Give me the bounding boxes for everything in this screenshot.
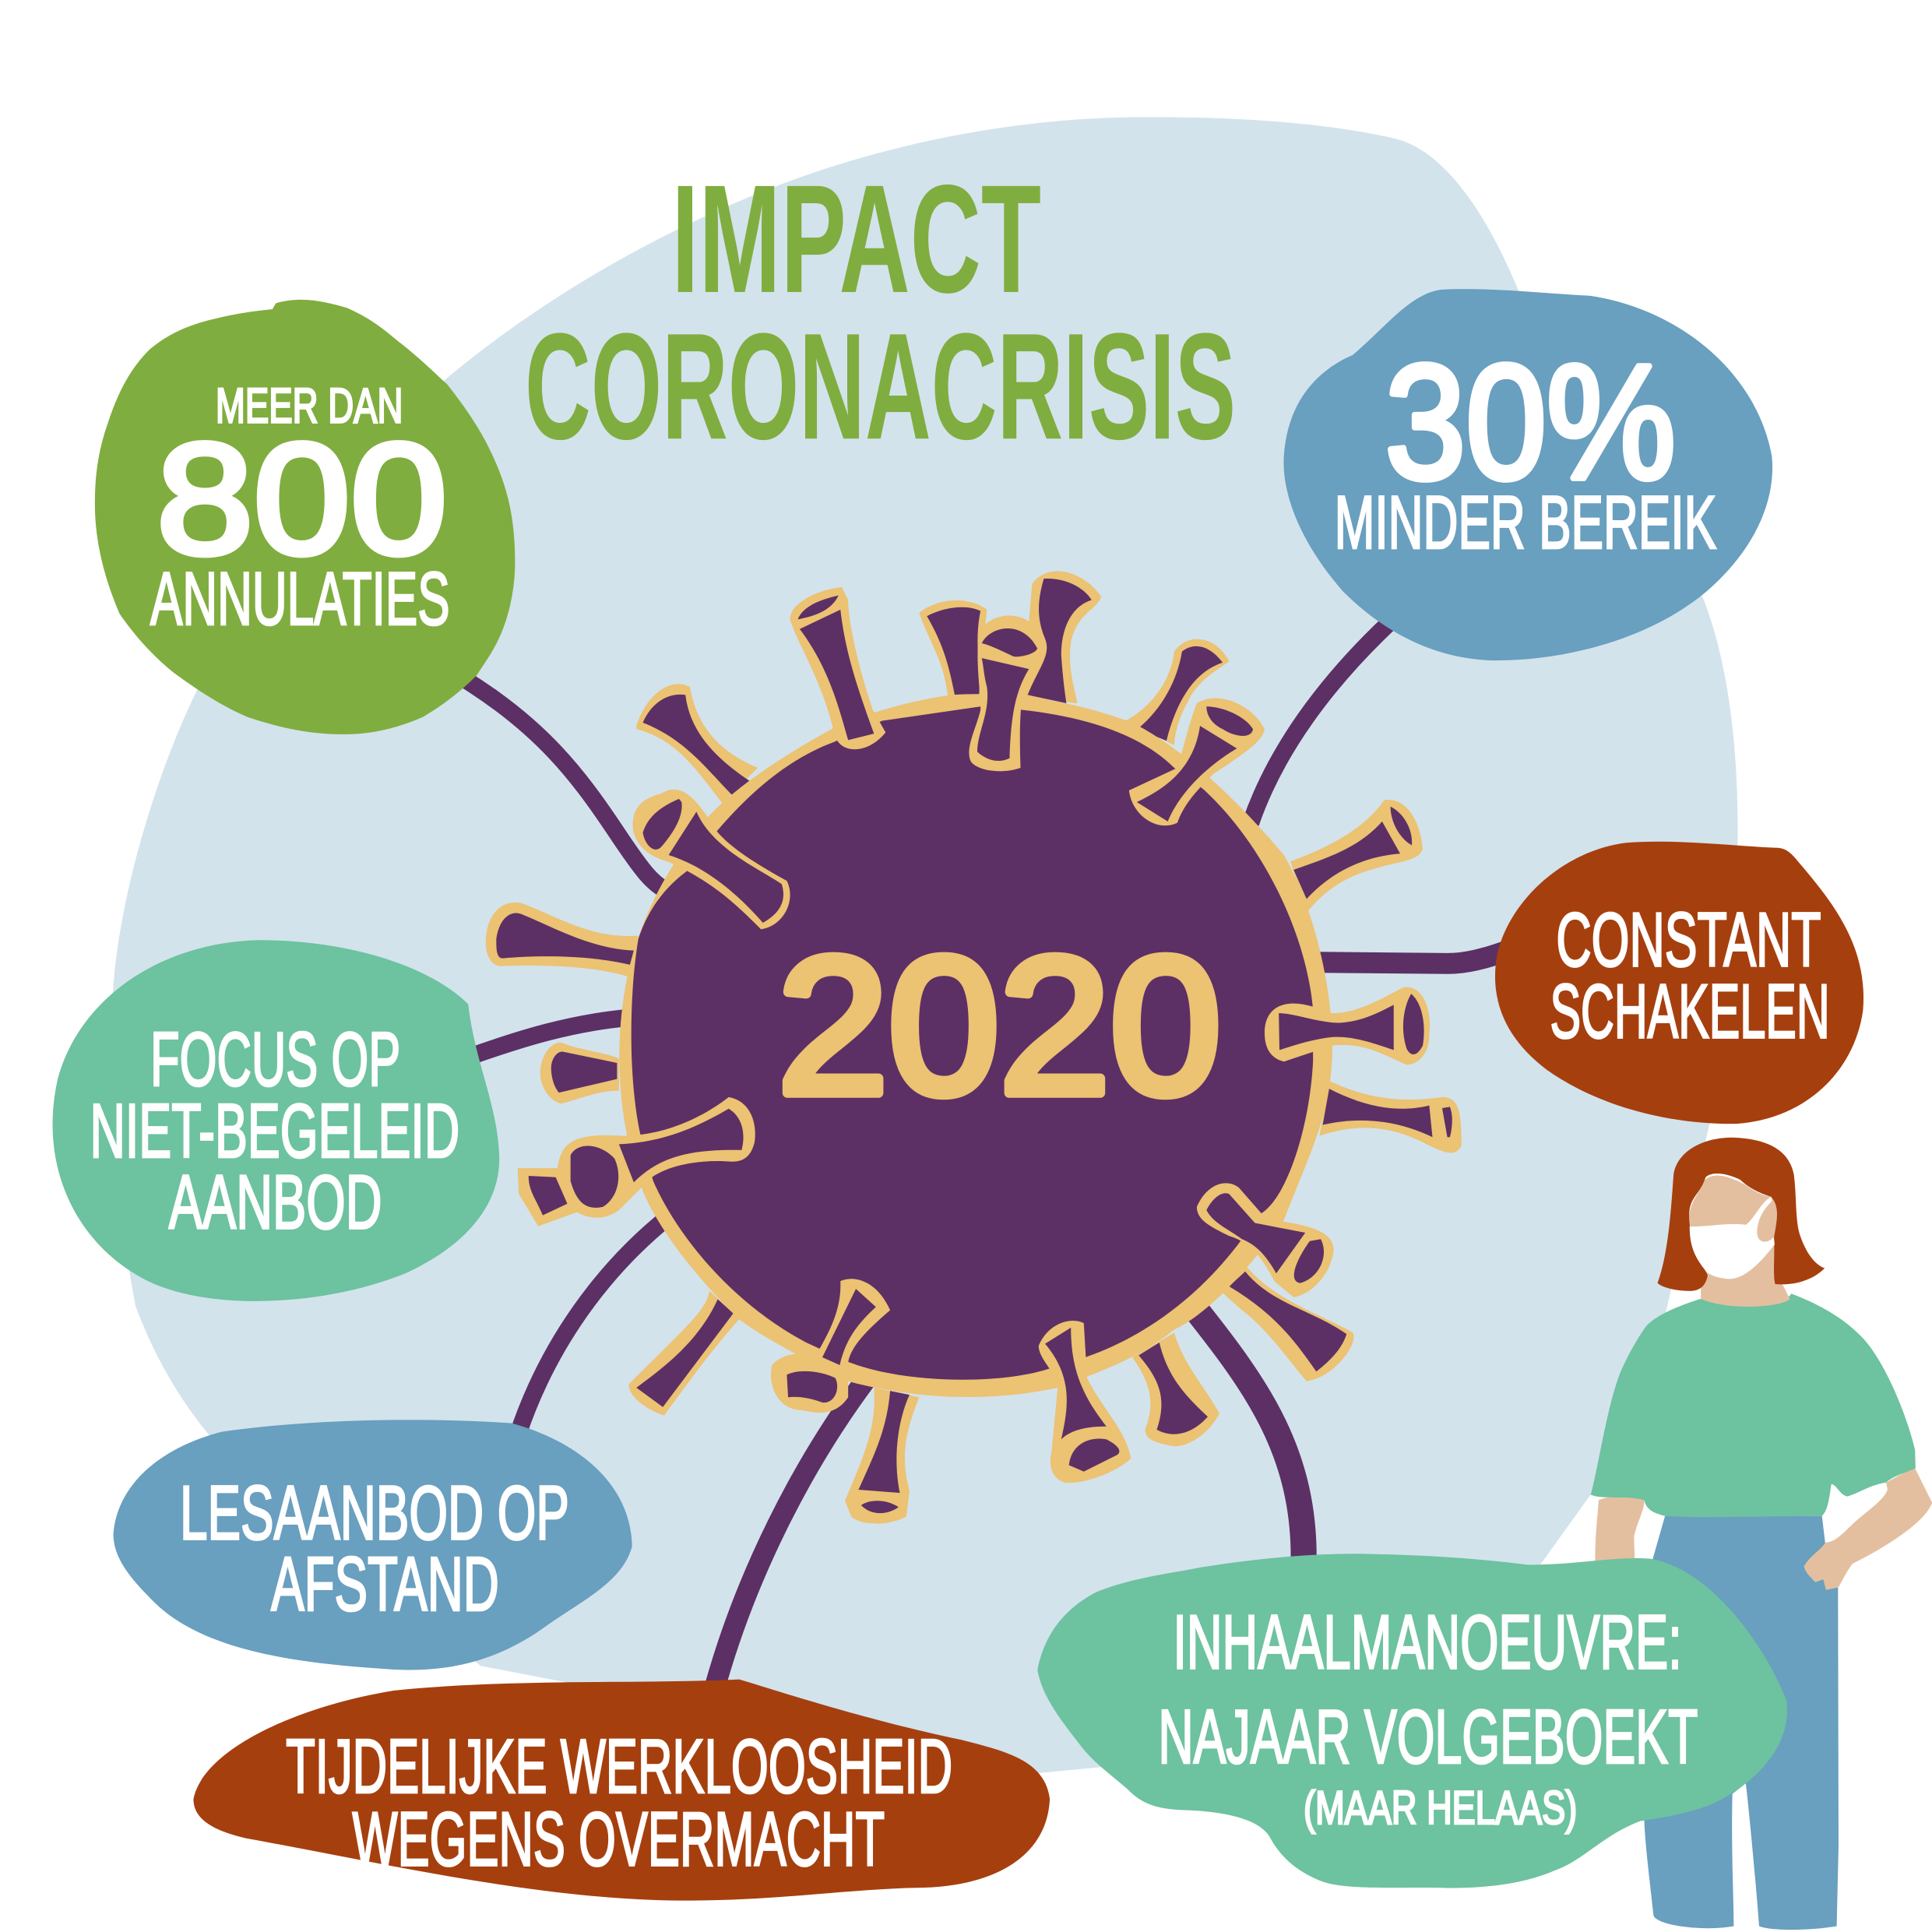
- bubble: focus op niet-begeleid aanbod: FOCUS OP: [150, 1016, 400, 1102]
- bubble: tijdelijke werkloosheid: [193, 1680, 1050, 1901]
- bubble: meer dan 800 annulaties: MEER DAN: [216, 379, 403, 434]
- woman figure: [1591, 1138, 1932, 1930]
- bubble: meer dan 800 annulaties: 800: [157, 410, 447, 586]
- back spikes: [486, 571, 1462, 1524]
- bubble: constant schakelen: [1495, 842, 1863, 1124]
- bubble: 30% minder bereik: MINDER BEREIK: [1335, 481, 1716, 565]
- connector lines: [462, 622, 1506, 1688]
- bubble: tijdelijke werkloosheid: WEGENS OVERMACHT: [353, 1797, 885, 1882]
- bubble: lesaanbod op afstand: AFSTAND: [271, 1541, 499, 1627]
- year label: 2020: [777, 917, 1221, 1134]
- bubble: inhaalmanoeuvre: [1037, 1554, 1787, 1888]
- bubble: meer dan 800 annulaties: [95, 300, 515, 734]
- bubble: focus op niet-begeleid aanbod: NIET-BEGELEID: [90, 1088, 459, 1174]
- bubble: inhaalmanoeuvre: (MAAR HELAAS): [1304, 1782, 1577, 1834]
- bubble: focus op niet-begeleid aanbod: AANBOD: [169, 1160, 382, 1245]
- title: IMPACT: [671, 153, 1041, 325]
- title: [525, 153, 1236, 471]
- bubble: meer dan 800 annulaties: ANNULATIES: [150, 558, 450, 641]
- bubble: tijdelijke werkloosheid: TIJDELIJKE WERKLOOSHEID: [286, 1723, 952, 1809]
- title: CORONACRISIS: [525, 302, 1236, 471]
- bubble: lesaanbod op afstand: [114, 1420, 632, 1670]
- bubble: 30% minder bereik: [1283, 289, 1772, 660]
- bubble: focus op niet-begeleid aanbod: [53, 940, 499, 1301]
- background blob: [111, 117, 1738, 1773]
- front spikes: [518, 587, 1430, 1483]
- virus body: [619, 694, 1332, 1397]
- bubble: lesaanbod op afstand: LESAANBOD OP: [180, 1469, 569, 1555]
- bubble: 30% minder bereik: 30%: [1385, 332, 1676, 513]
- virus: [486, 571, 1462, 1524]
